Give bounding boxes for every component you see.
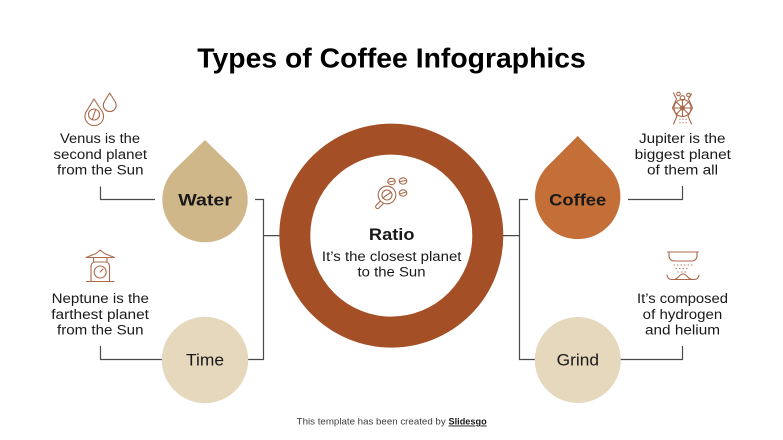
footer credit: This template has been created by — [297, 416, 446, 426]
text: grind description — [637, 291, 728, 338]
text: grind description: of hydrogen — [643, 307, 722, 322]
text: time description — [51, 291, 149, 338]
panel: grind — [535, 252, 728, 403]
label: Grind: Grind — [557, 350, 599, 369]
text: coffee description — [635, 131, 731, 178]
title: Types of Coffee Infographics — [197, 42, 586, 74]
label: Time: Time — [186, 350, 224, 369]
text: time description: from the Sun — [57, 322, 144, 338]
icon: coffee grinder wheel — [672, 92, 692, 124]
label: Coffee: Coffee — [549, 191, 606, 210]
text: grind description: It’s composed — [637, 291, 728, 306]
text: grind description: and helium — [645, 322, 720, 338]
text: coffee description: of them all — [647, 162, 718, 178]
panel: time — [51, 250, 248, 403]
text: water description: Venus is the — [60, 131, 140, 146]
heading: Ratio: Ratio — [369, 225, 414, 244]
coffee drop shape — [535, 136, 620, 239]
circle shape — [162, 317, 248, 403]
water drop shape — [162, 140, 248, 242]
text: time description: Neptune is the — [52, 291, 149, 306]
text: ratio description — [322, 249, 462, 280]
icon: magnifier and coffee beans — [376, 178, 407, 209]
text: water description: from the Sun — [57, 162, 144, 178]
panel: water — [54, 93, 248, 242]
footer credit: Slidesgo — [448, 416, 487, 426]
ring — [295, 139, 488, 332]
text: time description: farthest planet — [51, 307, 149, 322]
text: coffee description: biggest planet — [635, 147, 731, 162]
text: ratio description: It’s the closest planet — [322, 249, 462, 264]
icon: kitchen scale — [86, 250, 114, 282]
panel: coffee — [535, 92, 731, 239]
connector lines — [100, 186, 682, 360]
panel: ratio — [295, 139, 488, 332]
icon: water drops — [85, 93, 116, 126]
label: Water: Water — [178, 191, 232, 210]
icon: ground coffee filter — [667, 252, 699, 280]
text: water description: second planet — [54, 147, 147, 162]
circle shape — [535, 317, 621, 403]
text: water description — [54, 131, 147, 178]
text: coffee description: Jupiter is the — [639, 131, 726, 146]
text: ratio description: to the Sun — [358, 264, 426, 280]
